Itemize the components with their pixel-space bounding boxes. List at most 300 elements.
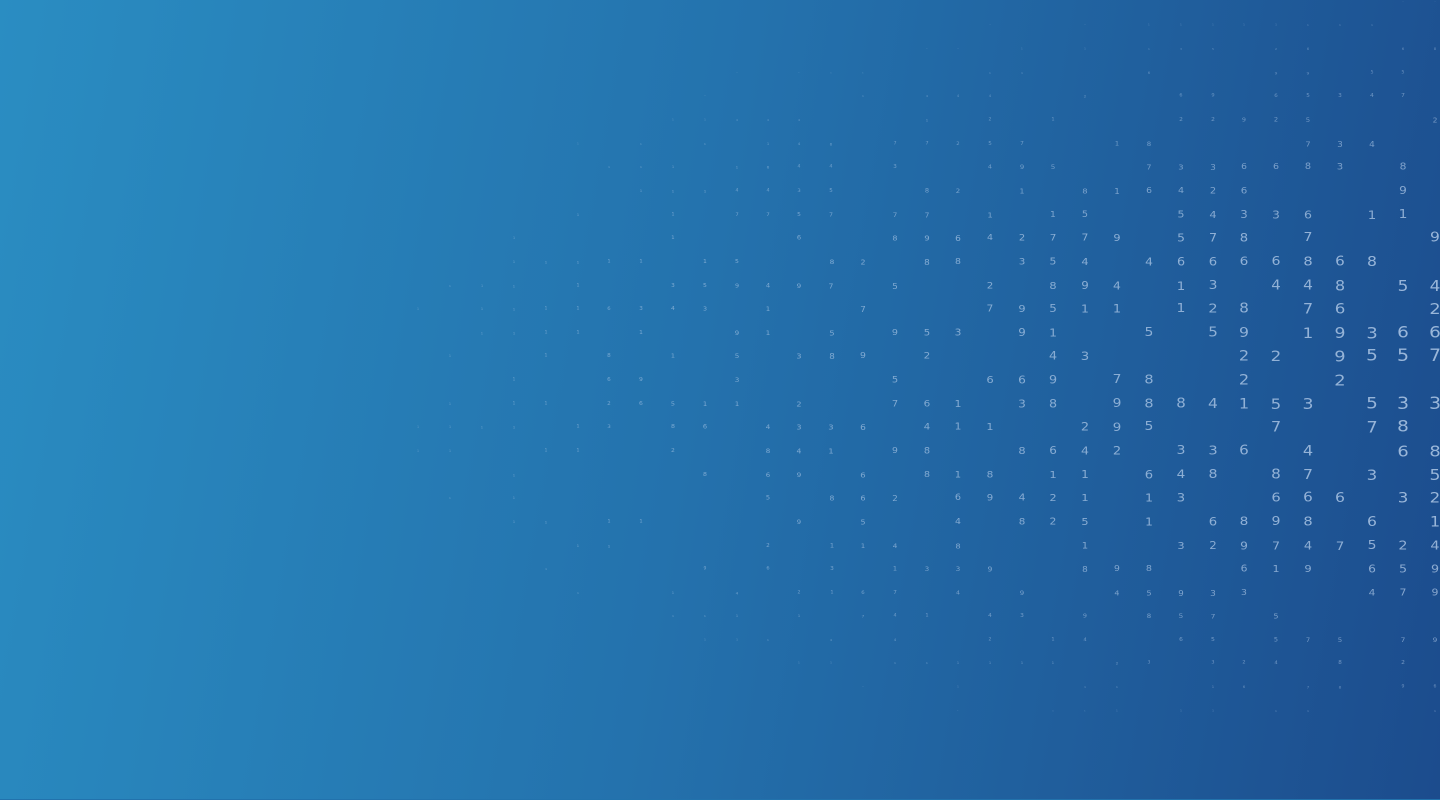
digit field: 7: [1050, 233, 1056, 243]
digit field: 5: [1208, 326, 1218, 340]
digit field: 4: [989, 94, 992, 98]
digit field: 9: [1018, 303, 1026, 315]
digit field: 9: [1334, 324, 1346, 342]
digit field: 1: [449, 449, 451, 453]
digit field: 1: [1116, 685, 1118, 689]
digit field: 1: [607, 259, 611, 264]
digit field: 9: [1431, 563, 1439, 575]
digit field: 2: [1208, 302, 1218, 316]
digit field: 7: [1303, 301, 1313, 317]
digit field: 3: [1081, 349, 1089, 363]
digit field: 8: [1367, 254, 1377, 270]
digit field: 5: [766, 495, 770, 501]
digit field: 9: [892, 328, 898, 338]
digit field: 4: [736, 118, 738, 122]
digit field: 3: [1366, 324, 1378, 342]
digit field: 2: [1116, 661, 1119, 665]
digit field: 4: [1114, 589, 1120, 597]
digit field: 5: [1273, 612, 1279, 620]
digit field: 6: [1177, 256, 1185, 268]
digit field: 4: [1304, 540, 1312, 552]
digit field: 2: [1084, 94, 1087, 98]
digit field: 4: [893, 542, 898, 550]
digit field: 1: [862, 686, 864, 688]
digit field: 6: [1145, 469, 1153, 481]
digit field: 3: [1209, 279, 1217, 293]
digit field: 1: [925, 613, 929, 618]
digit field: 1: [481, 331, 484, 335]
digit field: 2: [766, 543, 770, 549]
digit field: 4: [1083, 637, 1087, 643]
digit field: 1: [1212, 23, 1214, 26]
digit field: 5: [829, 329, 835, 337]
digit field: 6: [860, 494, 866, 502]
digit field: 3: [671, 283, 675, 289]
digit field: 6: [1209, 256, 1217, 268]
digit field: 2: [1334, 371, 1346, 389]
digit field: 1: [639, 259, 643, 264]
digit field: 6: [1434, 684, 1437, 689]
digit field: 4: [736, 591, 739, 595]
digit field: 1: [608, 165, 610, 169]
digit field: 1: [639, 330, 643, 336]
digit field: 3: [1338, 93, 1342, 99]
digit field: 4: [955, 517, 961, 527]
digit field: 1: [1399, 208, 1407, 222]
digit field: 1: [577, 591, 579, 595]
digit field: 3: [1210, 588, 1216, 598]
digit field: 6: [1397, 442, 1409, 460]
digit field: 1: [672, 119, 674, 121]
digit field: 5: [1366, 347, 1378, 365]
digit field: 6: [1335, 490, 1345, 506]
digit field: 1: [417, 307, 419, 311]
digit field: 2: [1239, 372, 1249, 388]
digit field: 6: [860, 422, 866, 432]
digit field: 5: [1145, 326, 1153, 340]
digit field: 1: [704, 614, 706, 618]
digit field: 5: [829, 188, 833, 194]
digit field: 9: [1178, 588, 1184, 598]
digit field: 1: [767, 142, 769, 146]
digit field: 2: [1433, 116, 1437, 124]
digit field: 4: [988, 613, 992, 619]
digit field: 1: [954, 398, 962, 410]
digit field: 4: [829, 164, 833, 169]
digit field: 4: [1370, 93, 1374, 99]
digit field: 9: [1211, 93, 1215, 98]
digit field: 4: [1081, 256, 1089, 268]
digit field: 8: [1240, 232, 1248, 244]
digit field: 4: [736, 188, 739, 193]
digit field: 1: [1148, 47, 1150, 51]
digit field: 1: [545, 306, 548, 311]
digit field: 2: [1398, 539, 1408, 553]
digit field: 3: [1178, 163, 1184, 171]
digit field: 5: [1399, 563, 1407, 575]
digit field: 1: [957, 48, 959, 50]
digit field: 5: [1178, 210, 1184, 220]
digit field: 7: [1271, 419, 1281, 435]
digit field: 8: [1082, 187, 1088, 195]
digit field: 7: [1400, 588, 1406, 598]
digit field: 2: [1049, 492, 1057, 504]
digit field: 1: [704, 95, 706, 97]
digit field: 1: [1052, 710, 1054, 712]
digit field: 9: [1334, 347, 1346, 365]
digit field: 1: [417, 425, 419, 429]
digit field: 1: [894, 661, 896, 665]
digit field: 2: [1274, 117, 1278, 123]
digit field: 3: [1367, 466, 1377, 484]
digit field: 6: [1179, 637, 1183, 643]
digit field: 4: [766, 423, 770, 431]
digit field: 1: [798, 72, 800, 74]
digit field: 2: [892, 493, 898, 503]
digit field: 4: [830, 638, 832, 642]
digit field: 6: [1049, 445, 1057, 457]
digit field: 1: [1115, 141, 1119, 147]
digit field: 1: [798, 614, 800, 618]
digit field: 1: [1084, 24, 1086, 26]
digit field: 6: [1241, 186, 1247, 196]
digit field: 5: [924, 328, 930, 338]
digit field: 8: [1338, 660, 1342, 666]
digit field: 1: [955, 422, 961, 432]
digit field: 5: [735, 259, 739, 265]
digit field: 9: [1433, 636, 1437, 644]
digit field: 9: [1304, 563, 1312, 575]
digit field: 6: [1179, 93, 1183, 98]
digit field: 1: [766, 329, 770, 337]
digit field: 8: [1049, 280, 1057, 292]
digit field: 4: [988, 164, 992, 170]
digit field: 5: [1306, 93, 1310, 99]
digit field: 6: [1273, 162, 1279, 172]
digit field: 2: [1430, 490, 1440, 506]
digit field: 1: [1430, 514, 1440, 530]
digit field: 1: [513, 425, 516, 429]
digit field: 4: [987, 233, 993, 243]
digit field: 4: [1303, 443, 1313, 459]
digit field: 7: [987, 304, 993, 314]
digit field: 6: [860, 471, 866, 479]
digit field: 8: [830, 494, 835, 502]
digit field: 3: [1148, 660, 1151, 665]
digit field: 1: [639, 519, 643, 524]
digit field: 6: [1209, 516, 1217, 528]
digit field: 1: [1145, 516, 1153, 528]
digit field: 6: [1241, 162, 1247, 172]
digit field: 5: [1306, 116, 1310, 124]
digit field: 6: [1271, 255, 1281, 269]
digit field: 1: [544, 401, 548, 406]
digit field: 1: [576, 330, 580, 335]
digit field: 8: [892, 234, 898, 242]
digit field: 1: [862, 94, 864, 98]
digit field: 1: [577, 544, 580, 548]
digit field: 1: [828, 447, 834, 455]
digit field: 6: [639, 401, 643, 407]
digit field: 9: [1083, 613, 1087, 619]
digit field: 1: [607, 519, 611, 524]
digit field: 5: [1368, 539, 1376, 553]
digit field: 3: [1020, 613, 1024, 619]
digit field: 4: [1208, 396, 1218, 412]
digit field: 8: [987, 470, 993, 480]
digit field: 1: [481, 307, 483, 311]
digit field: 5: [1271, 395, 1281, 413]
digit field: 1: [1303, 324, 1313, 342]
digit field: 8: [1240, 515, 1248, 529]
digit field: 1: [926, 48, 928, 50]
digit field: 8: [1434, 47, 1437, 51]
digit field: 3: [925, 565, 929, 573]
digit field: 1: [926, 118, 929, 122]
digit field: 3: [703, 306, 707, 312]
digit field: 7: [862, 614, 865, 618]
digit field: 2: [1209, 540, 1217, 552]
digit field: 3: [1337, 162, 1343, 172]
digit field: 1: [1339, 23, 1341, 27]
digit field: 5: [703, 283, 707, 289]
digit field: 1: [449, 425, 451, 429]
digit field: 7: [1307, 685, 1310, 689]
digit field: 9: [797, 518, 801, 526]
digit field: 1: [672, 165, 674, 169]
digit field: 1: [1084, 685, 1086, 689]
digit field: 5: [1370, 70, 1374, 75]
digit field: 4: [924, 422, 930, 432]
digit field: 9: [1020, 163, 1024, 171]
digit field: 6: [1304, 209, 1312, 221]
digit field: 3: [1211, 660, 1215, 665]
digit field: 7: [925, 141, 929, 146]
digit field: 9: [1240, 540, 1248, 552]
digit field: 1: [513, 260, 515, 264]
digit field: 6: [955, 233, 961, 243]
digit field: 7: [766, 212, 770, 218]
digit field: 9: [1242, 117, 1246, 123]
digit field: 1: [957, 685, 959, 688]
digit field: 1: [830, 590, 834, 595]
digit field: 9: [1271, 515, 1281, 529]
digit field: 5: [671, 401, 675, 407]
digit field: 4: [1081, 445, 1089, 457]
digit field: 8: [830, 258, 834, 266]
digit field: 6: [1335, 255, 1345, 269]
digit field: 5: [1274, 637, 1278, 643]
digit field: 3: [1303, 395, 1313, 413]
digit field: 8: [1208, 468, 1218, 482]
digit field: 8: [1335, 278, 1345, 294]
digit field: 7: [1082, 233, 1088, 243]
digit field: 1: [576, 448, 580, 453]
digit field: 8: [1303, 515, 1313, 529]
digit field: 9: [1432, 588, 1438, 598]
digit field: 3: [1019, 257, 1025, 267]
digit field: 1: [703, 259, 707, 265]
digit field: 8: [1146, 564, 1152, 574]
digit field: 1: [576, 283, 580, 288]
digit field: 7: [1401, 636, 1405, 644]
digit field: 1: [672, 614, 674, 618]
digit field: 5: [1401, 70, 1405, 75]
digit field: 1: [1148, 24, 1150, 26]
digit field: 4: [1177, 468, 1185, 482]
digit field: 3: [1177, 492, 1185, 504]
digit field: 1: [704, 638, 706, 641]
digit field: 1: [671, 235, 675, 241]
digit field: 5: [892, 281, 898, 291]
digit field: 1: [957, 661, 959, 665]
digit field: 2: [1179, 117, 1183, 123]
digit field: 4: [1178, 186, 1184, 196]
digit field: 1: [1180, 24, 1182, 26]
digit field: 1: [798, 662, 800, 664]
digit field: 6: [1274, 93, 1278, 99]
digit field: 1: [577, 260, 580, 264]
digit field: 8: [703, 472, 707, 478]
digit field: 1: [545, 448, 548, 453]
digit field: 2: [989, 117, 992, 122]
digit field: 1: [704, 142, 706, 146]
digit field: 5: [1211, 637, 1215, 643]
digit field: 1: [1051, 637, 1055, 642]
digit field: 4: [1369, 588, 1375, 598]
digit field: 3: [1398, 490, 1408, 506]
digit field: 7: [1336, 539, 1344, 553]
digit field: 9: [1081, 280, 1089, 292]
digit field: 3: [955, 328, 961, 338]
digit field: 1: [767, 638, 769, 642]
digit field: 7: [1401, 93, 1405, 99]
digit field: 1: [513, 236, 515, 240]
digit field: 1: [862, 72, 864, 74]
digit field: 6: [986, 374, 994, 386]
digit field: 4: [766, 283, 770, 289]
digit field: 1: [671, 212, 675, 217]
digit field: 3: [639, 306, 643, 312]
digit field: 8: [955, 257, 961, 267]
digit field: 3: [1208, 444, 1218, 458]
digit field: 6: [861, 590, 865, 596]
digit field: 5: [860, 518, 866, 526]
digit field: 1: [449, 284, 451, 288]
digit field: 9: [1307, 71, 1310, 75]
digit field: 1: [1021, 71, 1023, 75]
digit field: 1: [1307, 23, 1309, 27]
digit field: 2: [1050, 517, 1056, 527]
digit field: 2: [1019, 233, 1025, 243]
digit field: 6: [955, 493, 961, 503]
digit field: 4: [957, 94, 959, 98]
digit field: 7: [1303, 467, 1313, 483]
digit field: 1: [861, 542, 865, 550]
digit field: 4: [1049, 350, 1057, 362]
digit field: 8: [1018, 445, 1026, 457]
digit field: 4: [798, 118, 800, 122]
digit field: 1: [736, 614, 738, 618]
digit field: 1: [544, 353, 548, 358]
digit field: 6: [607, 306, 611, 312]
digit field: 7: [829, 212, 833, 218]
digit field: 9: [735, 283, 739, 289]
digit field: 6: [1402, 47, 1405, 51]
digit field: 5: [1050, 257, 1056, 267]
digit field: 9: [1275, 71, 1278, 75]
digit field: 3: [1180, 47, 1182, 51]
digit field: 1: [545, 567, 547, 571]
digit field: 6: [830, 142, 833, 146]
digit field: 7: [735, 212, 739, 218]
digit field: 8: [924, 446, 930, 456]
digit field: 1: [481, 425, 484, 429]
digit field: 4: [1145, 256, 1153, 268]
digit field: 8: [924, 257, 930, 267]
digit field: 6: [766, 566, 770, 571]
digit field: 1: [986, 421, 994, 433]
digit field: 5: [1177, 232, 1185, 244]
digit field: 1: [1434, 709, 1436, 713]
digit field: 1: [481, 284, 483, 288]
digit field: 4: [1430, 539, 1440, 553]
digit field: 1: [640, 142, 642, 146]
digit field: 1: [513, 473, 516, 477]
digit field: 2: [1242, 660, 1246, 665]
digit field: 6: [924, 399, 930, 409]
digit field: 6: [1368, 563, 1376, 575]
digit field: 2: [1401, 660, 1405, 666]
digit field: 2: [607, 401, 611, 407]
digit field: 8: [1147, 612, 1151, 620]
digit field: 1: [640, 189, 642, 193]
digit field: 9: [987, 493, 993, 503]
digit field: 1: [1049, 469, 1057, 481]
digit field: 1: [577, 213, 579, 217]
digit field: 6: [1307, 47, 1309, 51]
digit field: 3: [1018, 398, 1026, 410]
digit field: 6: [1148, 71, 1151, 75]
digit field: 2: [1239, 348, 1249, 364]
digit field: 9: [1018, 327, 1026, 339]
digit field: 1: [577, 143, 579, 145]
digit field: 1: [1082, 541, 1088, 551]
digit field: 8: [1271, 468, 1281, 482]
digit field: 1: [893, 566, 897, 572]
digit field: 8: [925, 188, 929, 194]
digit field: 1: [671, 353, 675, 359]
digit field: 7: [1209, 232, 1217, 244]
digit field: 1: [576, 424, 580, 429]
digit field: 5: [1081, 516, 1089, 528]
digit field: 1: [1081, 492, 1089, 504]
digit field: 9: [704, 566, 707, 571]
digit field: 1: [513, 331, 516, 335]
digit field: 5: [797, 212, 801, 218]
digit field: 9: [797, 471, 801, 479]
digit field: 3: [1177, 540, 1185, 552]
digit field: 4: [894, 638, 897, 642]
digit field: 8: [1049, 398, 1057, 410]
digit field: 1: [1084, 710, 1086, 712]
digit field: 9: [1113, 397, 1121, 411]
digit field: 4: [798, 142, 801, 146]
digit field: 8: [829, 351, 835, 361]
digit field: 4: [1271, 279, 1281, 293]
digit field: 1: [545, 260, 548, 264]
digit field: 6: [1239, 444, 1249, 458]
